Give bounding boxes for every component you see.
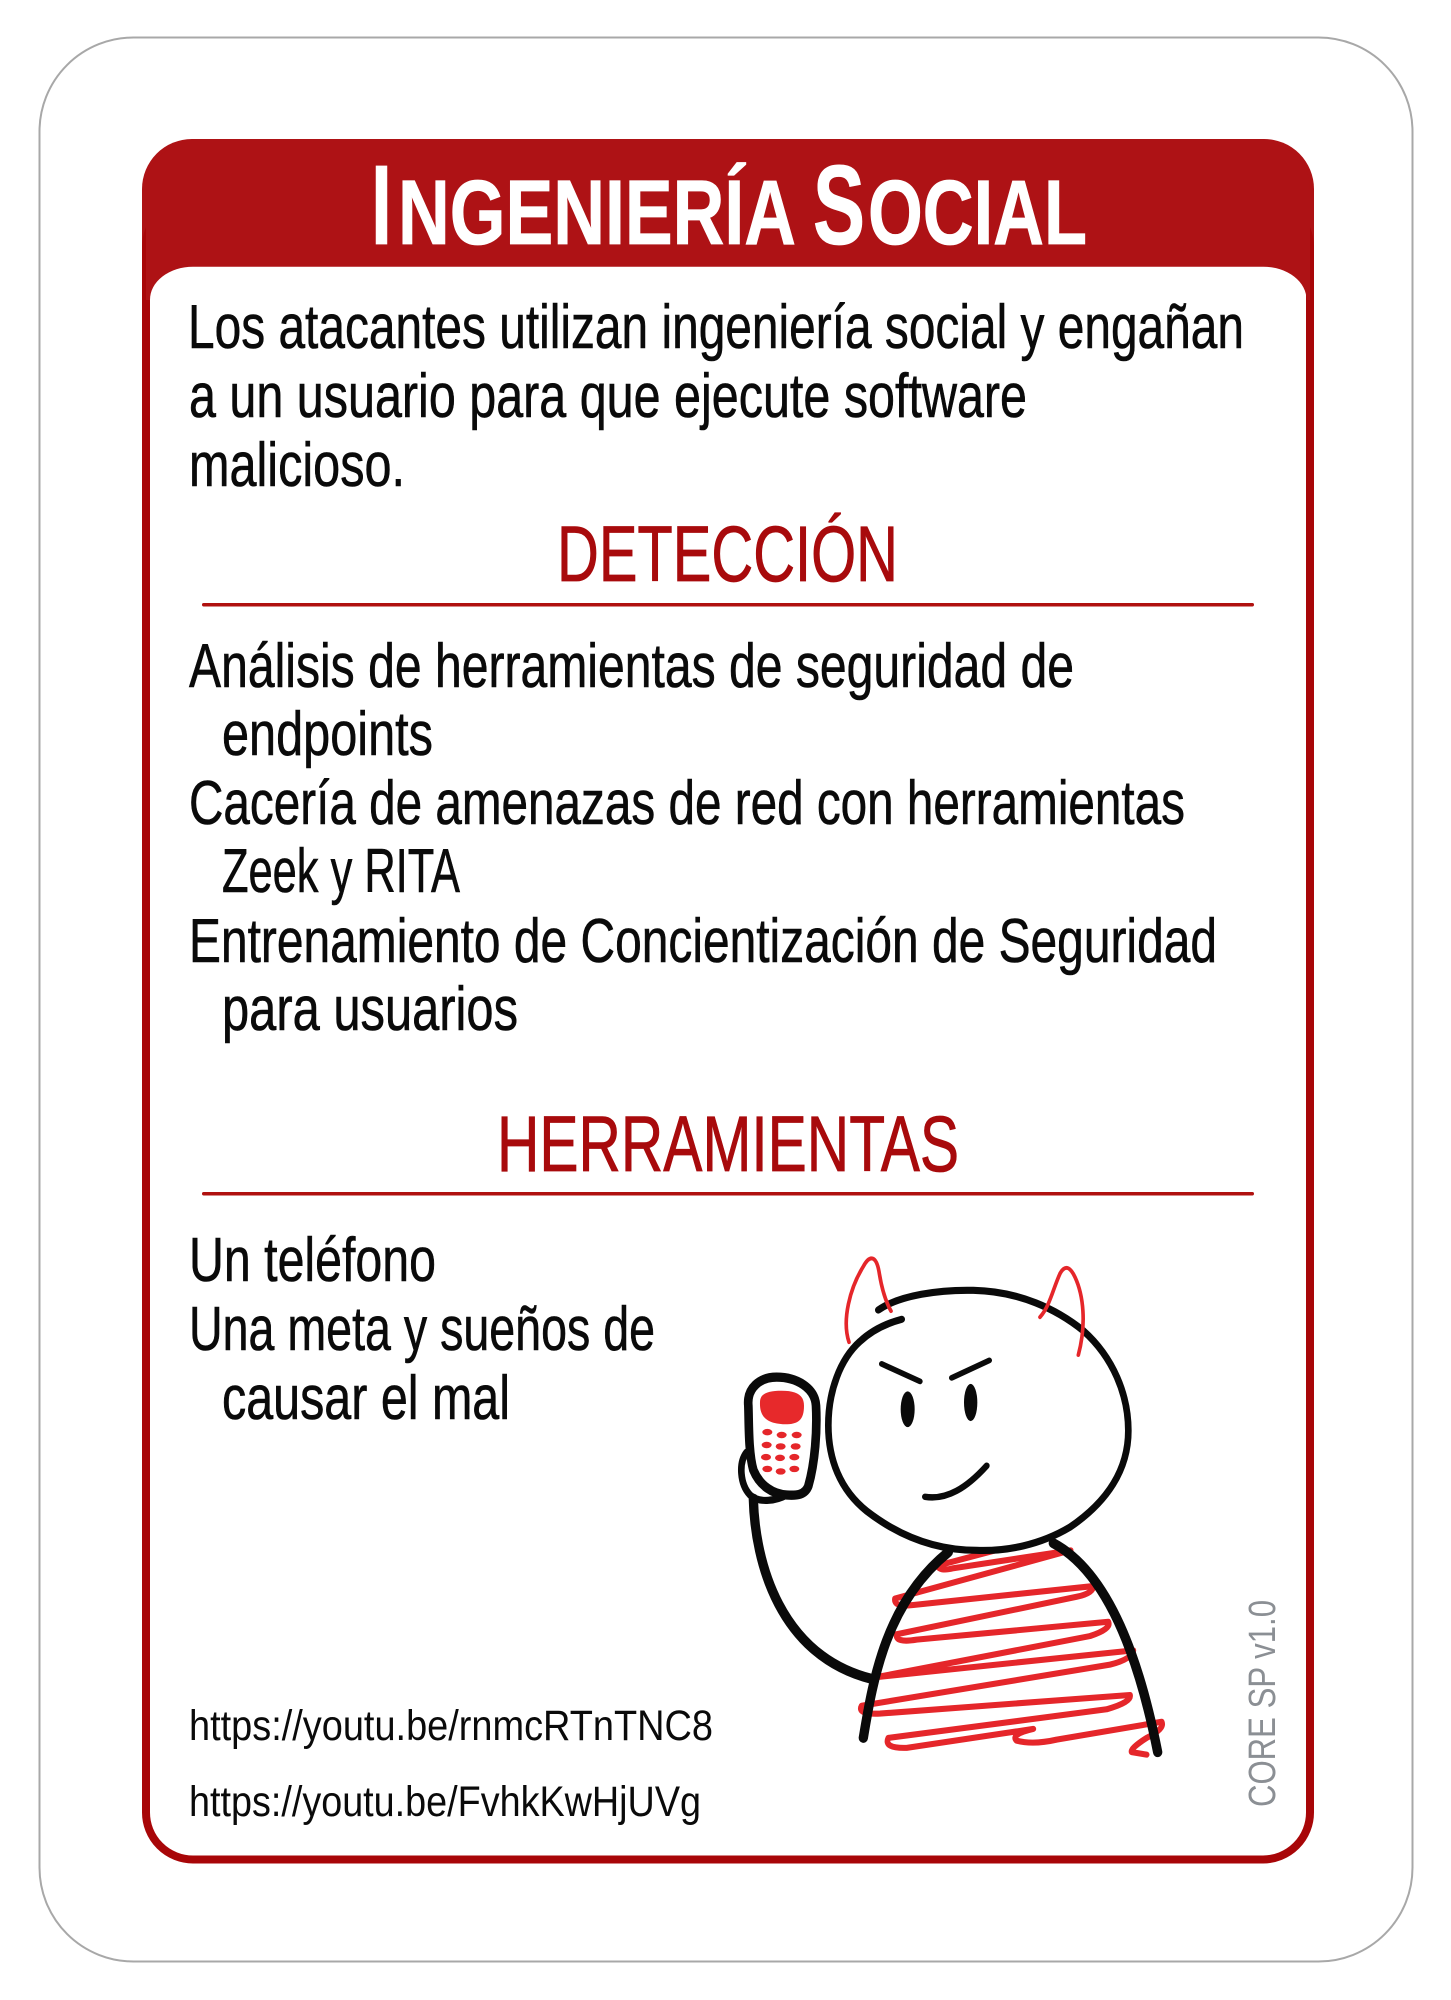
detection list: para usuarios [222, 975, 518, 1044]
title: NGENIERÍA [398, 161, 796, 264]
phone [741, 1377, 816, 1500]
head [828, 1290, 1128, 1550]
title: I [371, 142, 392, 268]
version label: CORE SP v1.0 [1242, 1600, 1284, 1807]
title: OCIAL [868, 162, 1087, 264]
heading: detección: DETECCIÓN [557, 509, 898, 598]
intro text: malicioso. [189, 431, 405, 500]
heading: herramientas: HERRAMIENTAS [497, 1099, 959, 1188]
detection list: Zeek y RITA [222, 837, 460, 906]
title: S [813, 142, 865, 268]
tools list: Un teléfono [189, 1226, 436, 1295]
video links [189, 1702, 713, 1826]
horns [846, 1258, 1083, 1355]
tools list: causar el mal [222, 1364, 510, 1433]
video links: https://youtu.be/rnmcRTnTNC8 [189, 1702, 713, 1750]
red scribble body [861, 1548, 1162, 1755]
detection list: endpoints [222, 700, 433, 769]
video links: https://youtu.be/FvhkKwHjUVg [189, 1778, 701, 1826]
intro text: a un usuario para que ejecute software [189, 362, 1027, 431]
detection list: Cacería de amenazas de red con herramientas [189, 769, 1185, 838]
tools list: Una meta y sueños de [189, 1295, 655, 1364]
tools list [189, 1226, 655, 1433]
arm and torso outline [753, 1499, 1158, 1752]
face [882, 1360, 989, 1497]
intro text [188, 293, 1244, 500]
illustration: devil character with phone [741, 1258, 1162, 1755]
detection list: Análisis de herramientas de seguridad de [189, 632, 1074, 701]
panel: red frame [142, 139, 1314, 1860]
detection list [189, 632, 1217, 1044]
